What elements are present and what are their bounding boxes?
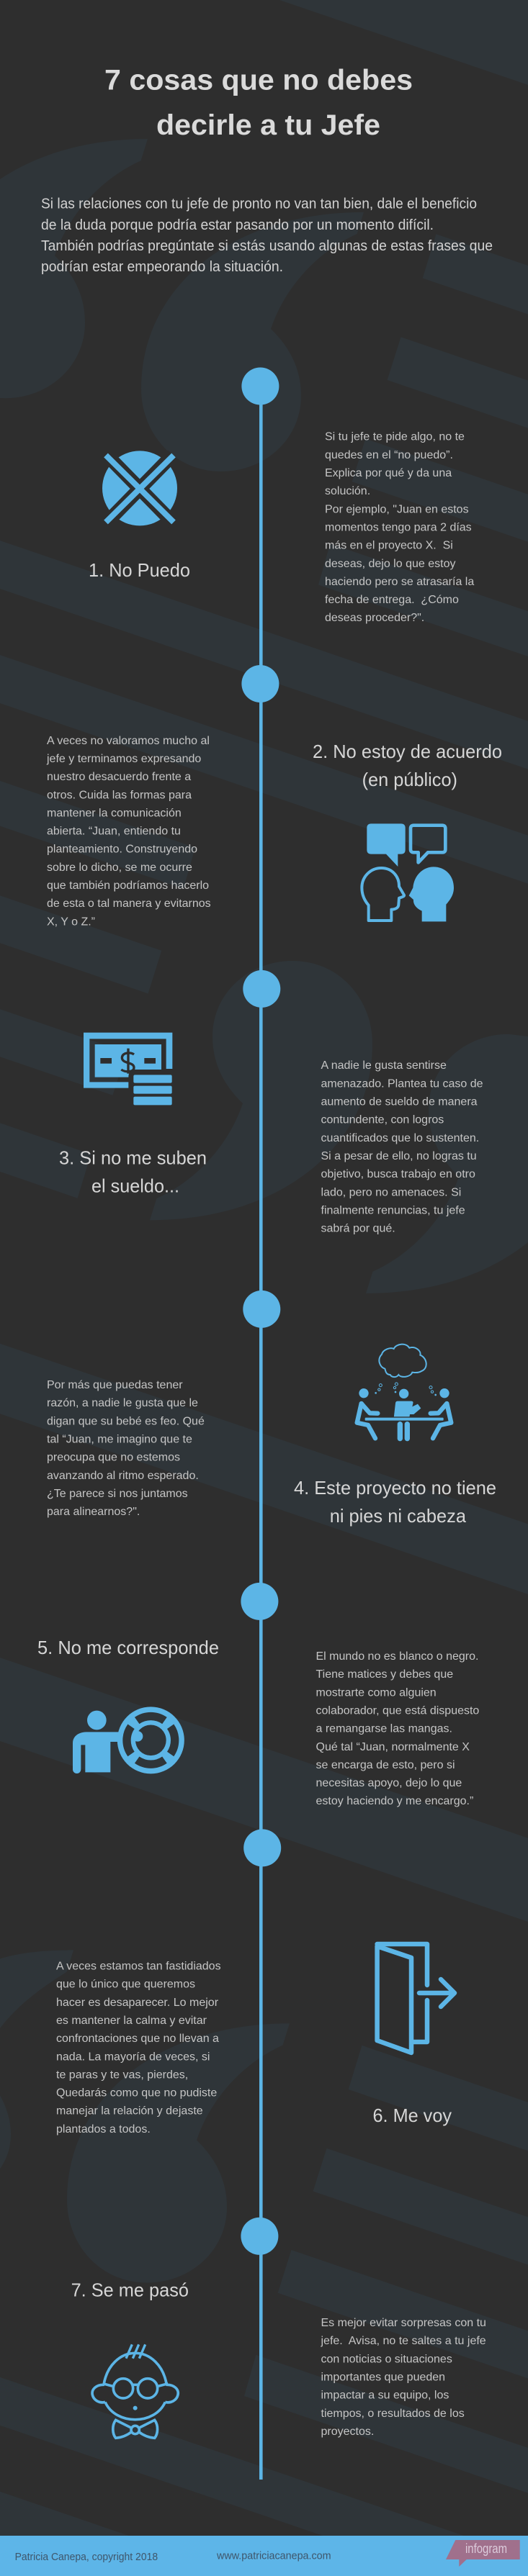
footer: www.patriciacanepa.com bbox=[216, 2550, 331, 2562]
heading 3 bbox=[59, 1147, 207, 1197]
text 7: proyectos. bbox=[321, 2426, 374, 2438]
text 7: con noticias o situaciones bbox=[321, 2353, 452, 2365]
footer: Patricia Canepa, copyright 2018 bbox=[15, 2551, 158, 2563]
text 4: digan que su bebé es feo. Qué bbox=[47, 1415, 205, 1427]
text 4: para alinearnos?". bbox=[47, 1506, 140, 1518]
text 4: tal “Juan, me imagino que te bbox=[47, 1434, 192, 1445]
title: decirle a tu Jefe bbox=[156, 109, 380, 141]
text 2: A veces no valoramos mucho al bbox=[47, 735, 210, 747]
title bbox=[104, 64, 413, 141]
text 7 bbox=[320, 2317, 486, 2438]
text 1: haciendo pero se atrasaría la bbox=[325, 576, 474, 588]
text 2: de esta o tal manera y evitarnos bbox=[47, 898, 211, 910]
text 4: ¿Te parece si nos juntamos bbox=[47, 1488, 188, 1500]
heading 2: (en público) bbox=[362, 769, 457, 790]
heading 4: ni pies ni cabeza bbox=[330, 1505, 467, 1527]
text 5: estoy haciendo y me encargo.” bbox=[316, 1795, 473, 1807]
text 4: Por más que puedas tener bbox=[47, 1379, 183, 1391]
text 5 bbox=[316, 1650, 479, 1807]
text 4 bbox=[47, 1379, 205, 1518]
footer bbox=[0, 2536, 528, 2576]
text 7: jefe. Avisa, no te saltes a tu jefe bbox=[320, 2335, 486, 2347]
text 3: amenazado. Plantea tu caso de bbox=[321, 1077, 483, 1090]
text 1: deseas proceder?". bbox=[325, 612, 424, 624]
text 2: X, Y o Z.” bbox=[47, 916, 95, 928]
text 3: lado, pero no amenaces. Si bbox=[321, 1186, 461, 1198]
text 6: hacer es desaparecer. Lo mejor bbox=[56, 1997, 219, 2009]
text 2: otros. Cuida las formas para bbox=[47, 789, 192, 801]
text 2: jefe y terminamos expresando bbox=[46, 753, 201, 765]
intro text: También podrías pregúntate si estás usando algunas de estas frases que bbox=[41, 238, 493, 254]
text 6: plantados a todos. bbox=[56, 2123, 151, 2136]
text 1 bbox=[325, 431, 474, 624]
text 1: Si tu jefe te pide algo, no te bbox=[325, 431, 465, 443]
icon: meeting with thought cloud bbox=[357, 1345, 451, 1441]
text 5: a remangarse las mangas. bbox=[316, 1723, 452, 1735]
text 1: Explica por qué y da una bbox=[325, 467, 452, 479]
text 5: mostrarte como alguien bbox=[316, 1686, 437, 1699]
heading 1: 1. No Puedo bbox=[89, 559, 190, 581]
text 1: más en el proyecto X. Si bbox=[325, 540, 453, 552]
text 5: necesitas apoyo, dejo lo que bbox=[316, 1777, 462, 1789]
icon: boy with glasses bbox=[92, 2344, 178, 2438]
text 3: objetivo, busca trabajo en otro bbox=[321, 1168, 475, 1180]
text 7: impactar a su equipo, los bbox=[321, 2390, 449, 2402]
text 3: contundente, con logros bbox=[321, 1114, 444, 1126]
text 6: confrontaciones que no llevan a bbox=[56, 2033, 219, 2045]
heading 3: el sueldo... bbox=[91, 1175, 179, 1197]
heading 5: 5. No me corresponde bbox=[37, 1637, 219, 1658]
heading 2: 2. No estoy de acuerdo bbox=[313, 741, 502, 762]
text 1: solución. bbox=[325, 485, 370, 497]
heading 4 bbox=[294, 1477, 496, 1527]
text 7: tiempos, o resultados de los bbox=[321, 2408, 465, 2420]
text 5: colaborador, que está dispuesto bbox=[316, 1704, 479, 1717]
icon: person with lifebuoy bbox=[73, 1707, 184, 1773]
icon: banknote bbox=[84, 1033, 172, 1105]
timeline bbox=[241, 367, 281, 2480]
text 5: El mundo no es blanco o negro. bbox=[316, 1650, 478, 1663]
text 7: importantes que pueden bbox=[321, 2371, 445, 2384]
text 6: que lo único que queremos bbox=[56, 1979, 195, 1991]
intro text: Si las relaciones con tu jefe de pronto no van tan bien, dale el beneficio bbox=[41, 196, 477, 212]
heading 6: 6. Me voy bbox=[373, 2105, 452, 2126]
heading 3: 3. Si no me suben bbox=[59, 1147, 207, 1169]
title: 7 cosas que no debes bbox=[104, 64, 413, 96]
text 5: Tiene matices y debes que bbox=[316, 1668, 453, 1681]
intro text: podrían estar empeorando la situación. bbox=[41, 259, 283, 275]
text 2: abierta. “Juan, entiendo tu bbox=[47, 826, 181, 838]
infogram badge bbox=[446, 2540, 520, 2567]
text 5: Qué tal “Juan, normalmente X bbox=[316, 1741, 470, 1753]
icon: crossed circle bbox=[102, 451, 177, 525]
text 6: Quedarás como que no pudiste bbox=[56, 2087, 217, 2100]
heading 7: 7. Se me pasó bbox=[71, 2279, 189, 2301]
infogram badge: infogram bbox=[465, 2541, 507, 2556]
text 2: que también podríamos hacerlo bbox=[47, 880, 209, 892]
heading 2 bbox=[313, 741, 502, 790]
icon: two heads talking bbox=[362, 823, 454, 921]
text 6: nada. La mayoría de veces, si bbox=[56, 2051, 210, 2063]
text 2: nuestro desacuerdo frente a bbox=[47, 771, 191, 783]
text 7: Es mejor evitar sorpresas con tu bbox=[321, 2317, 486, 2329]
text 2: mantener la comunicación bbox=[47, 807, 182, 819]
text 6: es mantener la calma y evitar bbox=[56, 2015, 207, 2027]
text 2: sobre lo dicho, se me ocurre bbox=[47, 862, 192, 874]
heading 4: 4. Este proyecto no tiene bbox=[294, 1477, 496, 1499]
text 1: deseas, dejo lo que estoy bbox=[325, 558, 455, 570]
intro text: de la duda porque podría estar pasando por un momento difícil. bbox=[41, 217, 434, 233]
text 1: fecha de entrega. ¿Cómo bbox=[325, 594, 459, 606]
text 4: razón, a nadie le gusta que le bbox=[47, 1397, 198, 1409]
text 6 bbox=[56, 1961, 221, 2136]
intro text bbox=[41, 196, 493, 275]
text 3: finalmente renuncias, tu jefe bbox=[321, 1204, 465, 1216]
icon: door with exit arrow bbox=[377, 1944, 455, 2053]
text 4: avanzando al ritmo esperado. bbox=[47, 1470, 199, 1482]
text 2: planteamiento. Construyendo bbox=[47, 844, 197, 856]
text 1: quedes en el “no puedo”. bbox=[325, 449, 453, 461]
text 6: manejar la relación y dejaste bbox=[56, 2105, 203, 2118]
text 3: Si a pesar de ello, no logras tu bbox=[321, 1150, 477, 1162]
text 4: preocupa que no estemos bbox=[47, 1452, 180, 1464]
text 3: cuantificados que lo sustenten. bbox=[321, 1132, 479, 1144]
text 3: sabrá por qué. bbox=[321, 1223, 395, 1235]
text 3: aumento de sueldo de manera bbox=[321, 1095, 478, 1108]
text 6: A veces estamos tan fastidiados bbox=[56, 1961, 221, 1972]
text 2 bbox=[46, 735, 211, 928]
text 3 bbox=[321, 1059, 483, 1235]
text 1: Por ejemplo, "Juan en estos bbox=[325, 503, 469, 515]
text 5: se encarga de esto, pero si bbox=[316, 1759, 455, 1771]
text 1: momentos tengo para 2 días bbox=[325, 521, 472, 534]
text 6: te paras y te vas, pierdes, bbox=[56, 2069, 188, 2081]
text 3: A nadie le gusta sentirse bbox=[321, 1059, 447, 1072]
